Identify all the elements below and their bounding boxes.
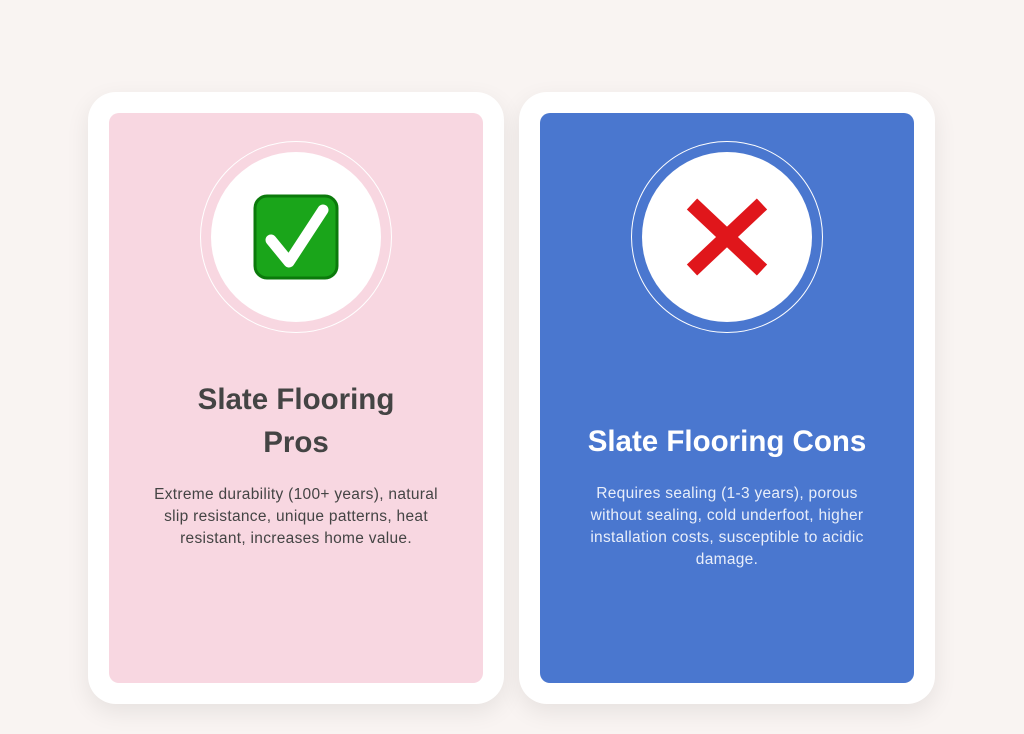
text: cons bbox=[590, 485, 864, 568]
heading: pros: Slate Flooring bbox=[198, 383, 394, 416]
card: pros bbox=[88, 92, 504, 704]
icon: check mark bbox=[200, 141, 392, 333]
text: cons: damage. bbox=[696, 551, 758, 568]
text: pros: Extreme durability (100+ years), natural bbox=[154, 486, 438, 503]
text: pros bbox=[154, 486, 438, 547]
card: cons bbox=[519, 92, 935, 704]
text: cons: Requires sealing (1-3 years), porous bbox=[596, 485, 858, 502]
heading: pros bbox=[198, 383, 394, 459]
panel: pros bbox=[109, 113, 483, 683]
text: cons: installation costs, susceptible to acidic bbox=[590, 529, 864, 546]
text: pros: slip resistance, unique patterns, heat bbox=[164, 508, 428, 525]
heading: cons: Slate Flooring Cons bbox=[588, 425, 866, 458]
icon: cross bbox=[631, 141, 823, 333]
panel: cons bbox=[540, 113, 914, 683]
heading: pros: Pros bbox=[263, 426, 329, 459]
text: cons: without sealing, cold underfoot, higher bbox=[591, 507, 863, 524]
text: pros: resistant, increases home value. bbox=[180, 530, 412, 547]
